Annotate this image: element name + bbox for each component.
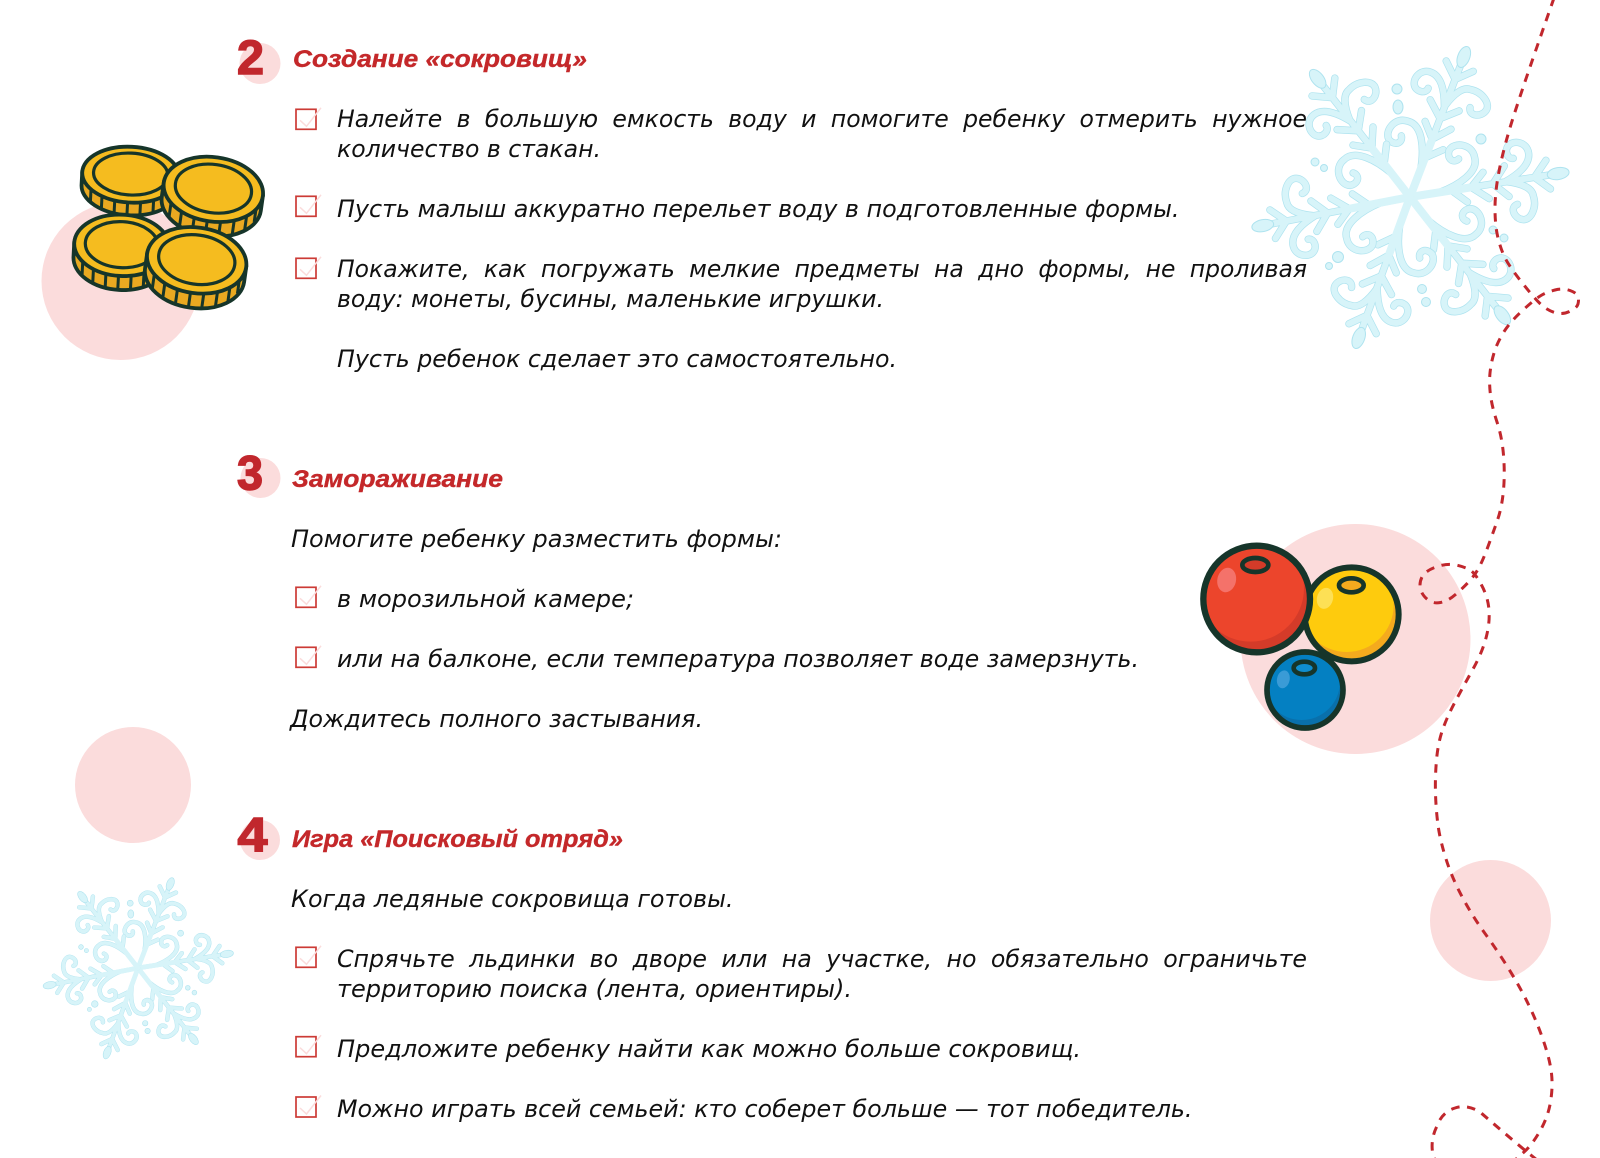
text: hide the ice: территорию поиска (лента, ориентиры). [337, 975, 852, 1003]
checkbox [296, 946, 321, 967]
checkbox [296, 646, 321, 667]
step number 2 with circle [237, 32, 280, 85]
coin: back right [157, 150, 267, 243]
dashed thread, upper and middle run [1420, 0, 1578, 1158]
step number 3 with circle [237, 448, 280, 500]
text: pour water: количество в стакан. [337, 135, 601, 163]
step number 3 with circle: 3 [237, 448, 263, 500]
text: freezer: в морозильной камере; [337, 585, 634, 613]
checkbox [296, 195, 321, 216]
step number 2 with circle: 2 [237, 32, 264, 85]
heading: step 3: Замораживание [292, 466, 503, 493]
text: family play: Можно играть всей семьей: кто соберет больше — тот победитель. [337, 1095, 1192, 1123]
bauble: yellow [1300, 558, 1399, 661]
icon: small snowflake bottom left [39, 868, 237, 1068]
icon: large snowflake top right [1244, 31, 1575, 363]
icon: three round baubles [1197, 535, 1399, 728]
text: find treasures: Предложите ребенку найти как можно больше сокровищ. [337, 1035, 1081, 1063]
step number 4 with circle: 4 [238, 810, 268, 862]
checkbox [296, 257, 321, 278]
panel: step 4, search party game [238, 810, 1307, 1123]
text: sink small objects: воду: монеты, бусины, маленькие игрушки. [337, 285, 884, 313]
decorative circle: behind coins [42, 202, 200, 360]
text: intro: Когда ледяные сокровища готовы. [291, 885, 734, 913]
coin: front left [72, 212, 171, 292]
icon: gold coins [72, 144, 267, 315]
text: balcony: или на балконе, если температура позволяет воде замерзнуть. [337, 645, 1139, 673]
text: sink small objects [337, 255, 1307, 373]
dashed thread, bottom loop [1432, 1107, 1537, 1158]
text: pour into moulds: Пусть малыш аккуратно перельет воду в подготовленные формы. [337, 195, 1180, 223]
coin: front right [141, 221, 251, 315]
text: pour water: Налейте в большую емкость воду и помогите ребенку отмерить нужное [337, 105, 1307, 133]
coin: back left [80, 144, 181, 218]
text: hide the ice: Спрячьте льдинки во дворе или на участке, но обязательно ограничьте [337, 945, 1307, 973]
text: sink small objects: Пусть ребенок сделает это самостоятельно. [337, 345, 897, 373]
text: wait: Дождитесь полного застывания. [289, 705, 703, 733]
step number 4 with circle [238, 810, 280, 862]
panel: step 3, freezing [237, 448, 1139, 733]
heading: step 4: Игра «Поисковый отряд» [292, 826, 623, 853]
decorative circle: lower right [1430, 860, 1551, 981]
bauble: blue [1263, 643, 1343, 728]
text: hide the ice [337, 945, 1307, 1003]
decorative circle: behind baubles [1240, 524, 1470, 754]
checkbox [296, 586, 321, 607]
bauble: red [1197, 535, 1310, 652]
text: sink small objects: Покажите, как погружать мелкие предметы на дно формы, не проливая [337, 255, 1307, 283]
checkbox [296, 108, 321, 129]
checkbox [296, 1096, 321, 1117]
text: pour water [337, 105, 1307, 163]
text: intro: Помогите ребенку разместить формы: [291, 525, 782, 553]
panel: step 2, creating treasures [237, 32, 1307, 373]
checkbox [296, 1035, 321, 1057]
decorative circle: middle left [75, 727, 191, 843]
heading: step 2: Создание «сокровищ» [293, 46, 587, 73]
